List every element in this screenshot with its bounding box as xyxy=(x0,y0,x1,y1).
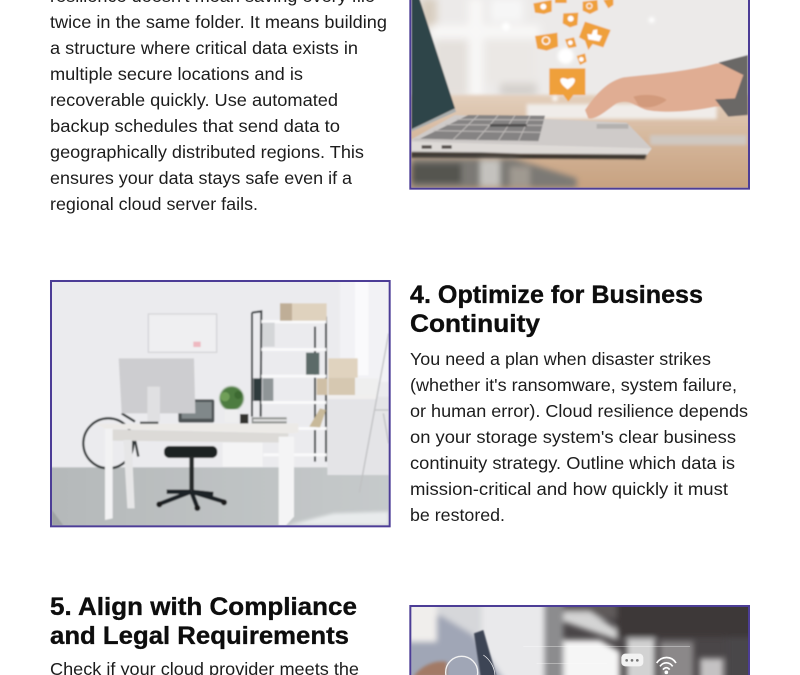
text block: section 4 body: continuity strategy. Outline which data is xyxy=(410,453,735,473)
floating icons xyxy=(533,0,613,102)
text block: section 3 body: backup schedules that send data to xyxy=(50,116,340,136)
bicycle wheel xyxy=(83,418,133,468)
text block: section 3 body: multiple secure locations and is xyxy=(50,64,303,84)
heading: Optimize for Business Continuity: Continuity xyxy=(410,310,540,338)
text block: section 4 body: on your storage system's clear business xyxy=(410,427,736,447)
office chair xyxy=(164,446,217,458)
heading: Optimize for Business Continuity xyxy=(410,281,703,338)
desk reflection xyxy=(411,152,647,159)
text block: section 3 body: a structure where critical data exists in xyxy=(50,38,358,58)
text block: section 3 body: twice in the same folder. It means building xyxy=(50,12,387,32)
hand xyxy=(585,63,747,119)
text block: section 4 body: be restored. xyxy=(410,505,505,525)
heading: Align with Compliance and Legal Requirements: 5. Align with Compliance xyxy=(50,593,357,621)
monitor xyxy=(119,358,195,413)
heading: Align with Compliance and Legal Requirements: and Legal Requirements xyxy=(50,622,349,650)
laptop screen xyxy=(411,0,455,129)
text block: section 3 body: geographically distributed regions. This xyxy=(50,142,364,162)
photo: businessman with network icons xyxy=(409,605,750,675)
text block: section 3 body: recoverable quickly. Use automated xyxy=(50,90,338,110)
drawer unit xyxy=(224,444,262,466)
desk items xyxy=(252,417,287,426)
laptop deck xyxy=(412,114,652,149)
text block: section 4 body: mission-critical and how quickly it must xyxy=(410,479,728,499)
text block: section 4 body: (whether it's ransomware, system failure, xyxy=(410,375,737,395)
photo: white office with desk and shelves xyxy=(43,273,397,534)
icon: wifi xyxy=(657,657,676,673)
easel xyxy=(362,333,388,476)
text block: section 4 body: You need a plan when disaster strikes xyxy=(410,349,711,369)
whiteboard xyxy=(148,314,217,352)
text block: section 3 body: ensures your data stays safe even if a xyxy=(50,168,352,188)
plant xyxy=(220,386,244,410)
photo: hand over laptop with social icons xyxy=(403,0,757,197)
section 4 xyxy=(410,281,748,525)
text block: section 4 body: or human error). Cloud resilience depends xyxy=(410,401,748,421)
text block: section 3 body: regional cloud server fails. xyxy=(50,194,258,214)
shelf unit xyxy=(252,311,261,417)
heading: Align with Compliance and Legal Requirements xyxy=(50,593,357,650)
boxes xyxy=(328,358,358,378)
icon: chat bubble xyxy=(621,654,643,666)
desk xyxy=(122,422,298,431)
heading: Optimize for Business Continuity: 4. Optimize for Business xyxy=(410,281,703,309)
chair back xyxy=(178,399,214,423)
text block: section 4 body xyxy=(410,349,748,525)
keyboard xyxy=(420,115,545,141)
text block: section 3 body xyxy=(50,0,387,214)
section 5 xyxy=(50,593,359,675)
